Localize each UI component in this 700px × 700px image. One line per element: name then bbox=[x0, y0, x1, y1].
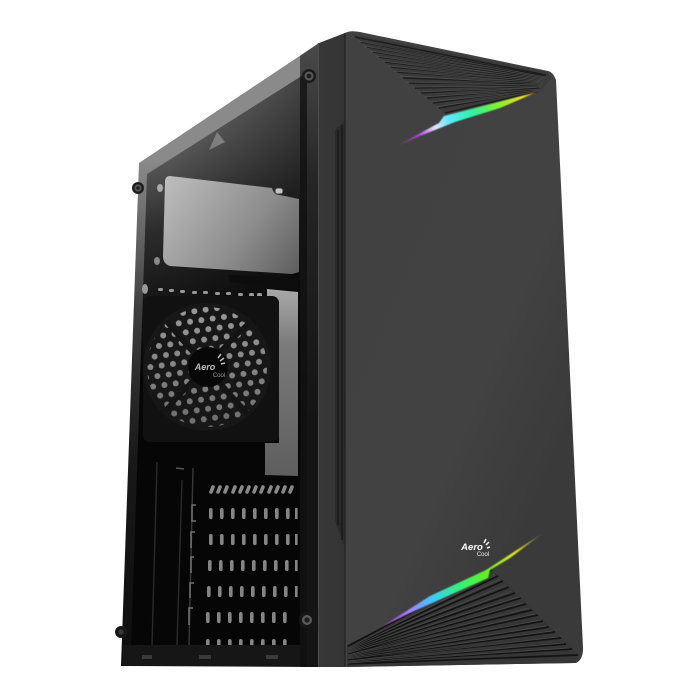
motherboard tray slots bbox=[206, 487, 298, 649]
fan blade struts bbox=[164, 322, 250, 414]
panel: tempered glass side bbox=[121, 43, 319, 667]
panel: front bezel side strip bbox=[319, 33, 349, 667]
fan hub with logo bbox=[188, 347, 228, 387]
glass bottom strip bbox=[123, 645, 319, 666]
cable under power supply bbox=[228, 275, 298, 290]
fan grill holes bbox=[147, 307, 267, 427]
top RGB light bar bbox=[397, 92, 537, 146]
diagonal vent row bbox=[211, 487, 292, 492]
slot grid bbox=[206, 508, 298, 649]
fan bbox=[140, 295, 279, 442]
expansion slot clips bbox=[189, 505, 196, 625]
perforation row above fan bbox=[142, 284, 262, 298]
icon: thumbscrew bottom right bbox=[299, 612, 315, 628]
power supply opening bbox=[154, 176, 299, 274]
drive bay opening bbox=[265, 289, 298, 476]
front panel logo bbox=[460, 539, 490, 558]
front panel logo: Cool bbox=[477, 552, 489, 558]
panel: front face bbox=[345, 31, 583, 667]
illustration: PC tower case bbox=[115, 31, 583, 667]
top ribbed triangle bbox=[352, 34, 552, 114]
bottom RGB light bar bbox=[383, 533, 543, 626]
frame pillar bbox=[300, 43, 319, 667]
fan hub with logo: Cool bbox=[213, 373, 225, 379]
side vent slits bbox=[335, 122, 349, 550]
front panel logo: Aero bbox=[460, 542, 483, 553]
expansion slot lines bbox=[152, 462, 193, 645]
fan hub with logo: Aero bbox=[194, 362, 216, 372]
icon: thumbscrew top right bbox=[302, 69, 316, 83]
bottom ribbed triangle bbox=[347, 570, 579, 667]
side arrow mark bbox=[209, 132, 225, 150]
glass interior bbox=[131, 77, 300, 651]
icon: thumbscrew bottom left bbox=[115, 626, 127, 638]
icon: thumbscrew top left bbox=[132, 182, 144, 194]
